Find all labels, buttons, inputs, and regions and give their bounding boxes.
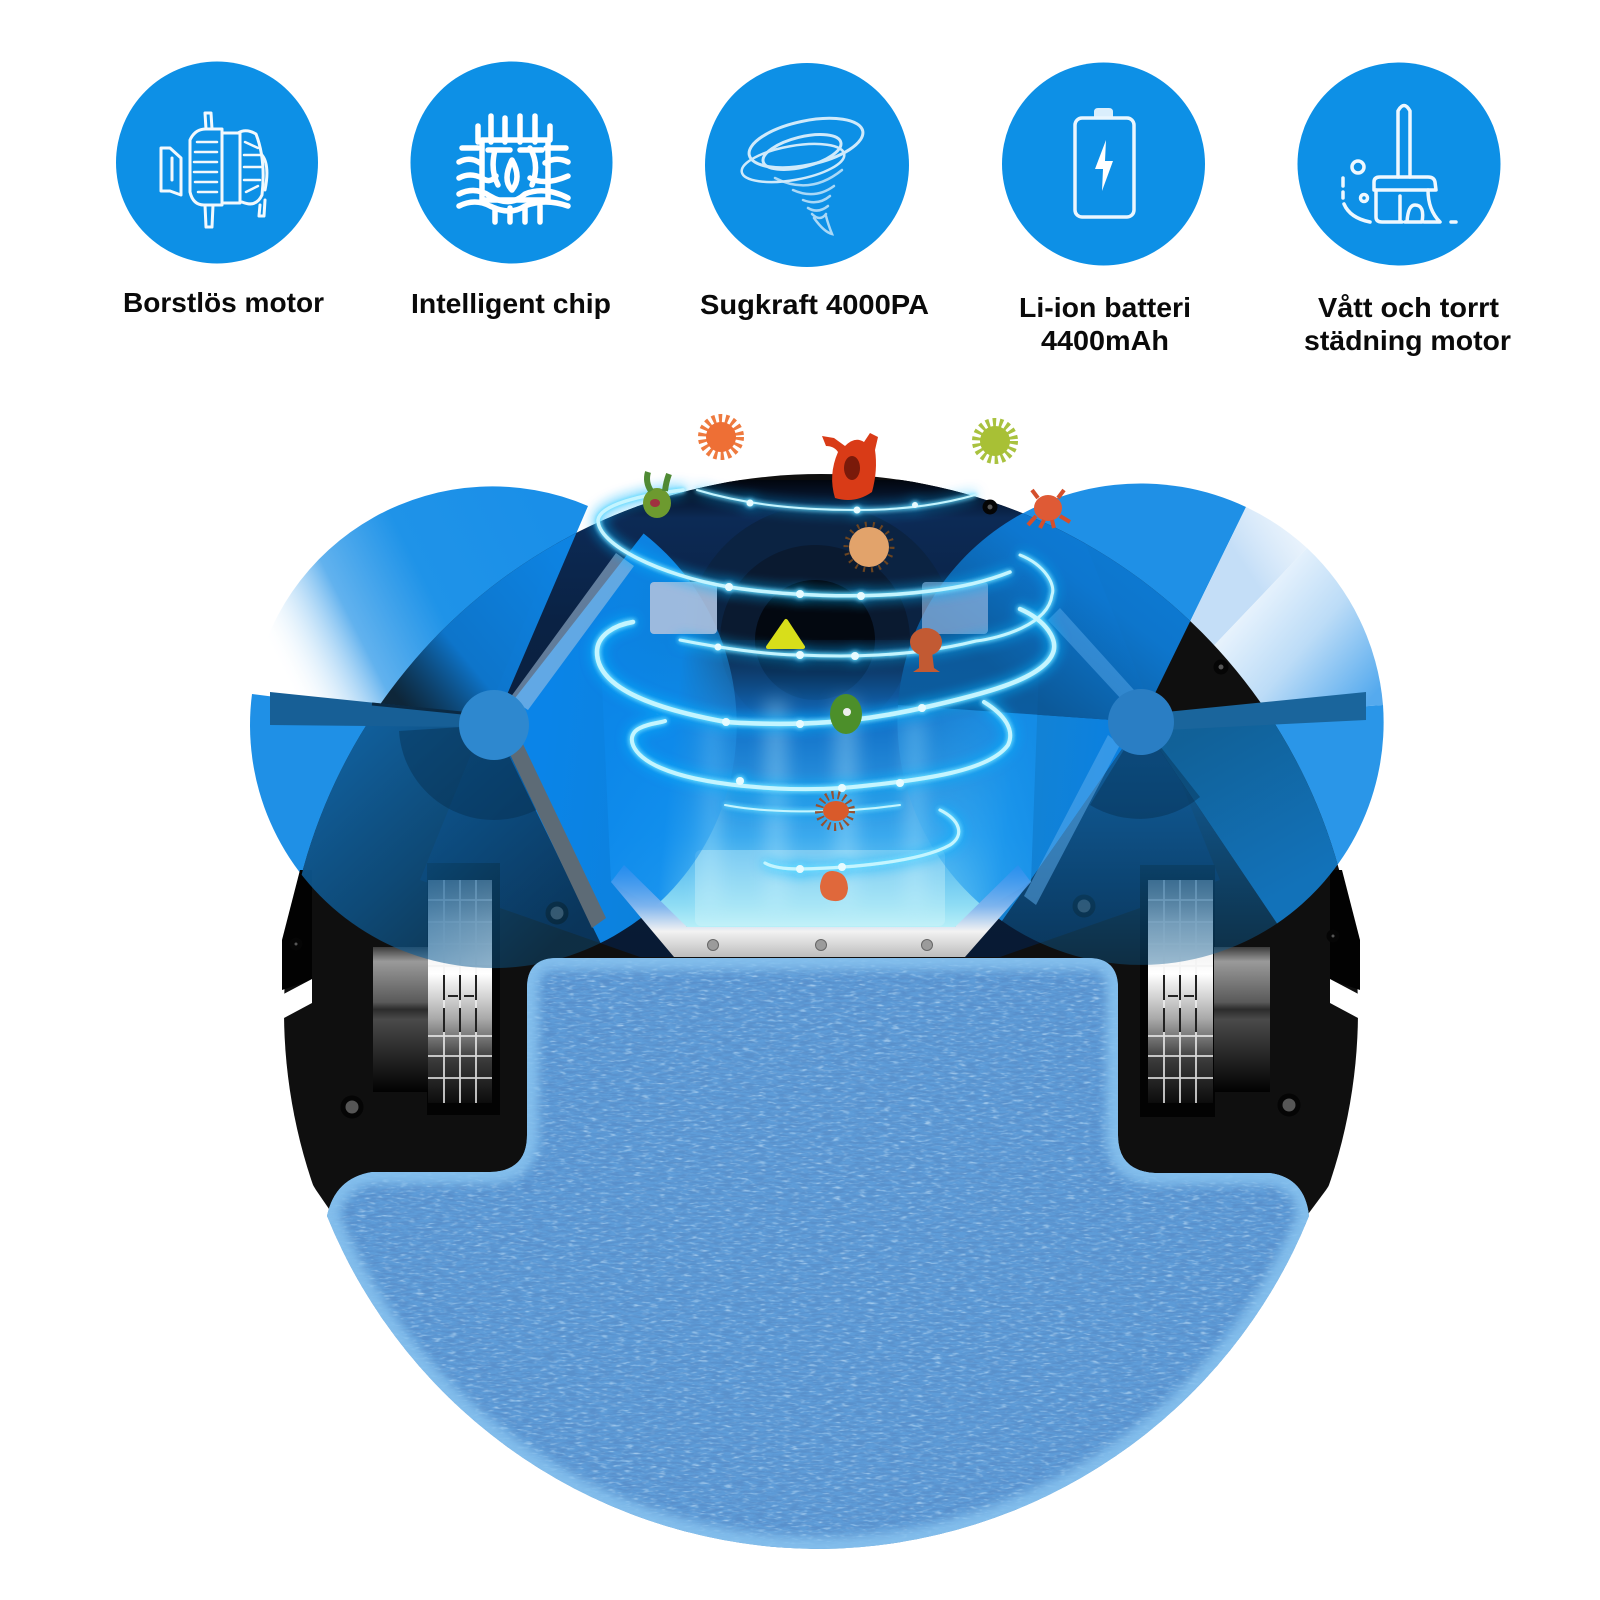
germ: green monster: [830, 694, 862, 734]
feature: suction: [705, 63, 909, 267]
interior dust bay: [420, 480, 1220, 957]
label: Vått och torrt städning motor: Vått och torrt: [1318, 292, 1499, 323]
wheel: left: [373, 863, 500, 1115]
germ: green virus: [978, 424, 1012, 458]
pale filter panel: right: [922, 582, 988, 634]
icon: motor: [161, 113, 267, 227]
icon circle: chip: [410, 62, 612, 264]
label: Li-ion batteri 4400mAh: 4400mAh: [1041, 325, 1169, 356]
notch: left: [278, 979, 312, 1018]
brush hub: left: [459, 690, 529, 760]
feature: brushless motor: [116, 62, 324, 318]
icon circle: tornado: [705, 63, 909, 267]
germ: yellow triangle: [768, 621, 803, 647]
icon circle: mop: [1298, 62, 1500, 266]
label: Li-ion batteri 4400mAh: [1019, 292, 1191, 356]
germ: orange virus: [704, 420, 738, 454]
germ: tan virus: [846, 524, 892, 570]
germ: red monster: [822, 433, 878, 500]
pale filter panel: left: [650, 582, 717, 634]
brush arms: right: [1024, 608, 1366, 905]
label: Intelligent chip: Intelligent chip: [411, 288, 611, 319]
light cone: [600, 640, 1040, 927]
side brush sweep outside body: right: [991, 483, 1384, 924]
screws: [292, 502, 1337, 1116]
label: Vått och torrt städning motor: städning motor: [1304, 325, 1511, 356]
feature: intelligent chip: [410, 62, 612, 264]
germ: orange spiky bug: [819, 795, 851, 827]
mop pad: [320, 950, 1320, 1560]
label: Sugkraft 4000PA: Sugkraft 4000PA: [700, 289, 929, 320]
germ: red crab: [1028, 490, 1070, 528]
recess: left: [399, 725, 540, 820]
germ: green alien: [643, 472, 671, 518]
germ: orange blob: [820, 871, 848, 901]
robot body: [282, 474, 1360, 1214]
brush hub: right: [1108, 689, 1174, 755]
icon: tornado: [739, 109, 867, 234]
feature: battery: [1002, 62, 1205, 266]
germ: brown mushroom: [910, 628, 942, 672]
icon circle: motor: [116, 62, 318, 264]
label: Vått och torrt städning motor: [1304, 292, 1511, 356]
label: Borstlös motor: Borstlös motor: [123, 287, 324, 318]
side brush: right: [897, 483, 1384, 965]
side brush: left: [270, 533, 736, 968]
sweep sectors on body: left: [302, 533, 736, 968]
recess: right: [1090, 722, 1200, 819]
icon circle: battery: [1002, 62, 1205, 266]
sweep sectors on body: right: [898, 513, 1338, 965]
robot vacuum illustration: [250, 420, 1384, 1560]
brush arms: left: [270, 553, 634, 928]
wheel: right: [1140, 865, 1270, 1117]
notch: right: [1330, 979, 1364, 1018]
icon: battery: [1075, 108, 1134, 217]
brush bay plate: [611, 865, 1031, 957]
side brush sweep outside body: left: [250, 486, 600, 968]
feature: wet and dry: [1298, 62, 1500, 266]
icon: chip: [459, 116, 568, 222]
label: Li-ion batteri 4400mAh: Li-ion batteri: [1019, 292, 1191, 323]
cyclone spirals: [597, 490, 1054, 873]
icon: mop: [1343, 106, 1456, 222]
